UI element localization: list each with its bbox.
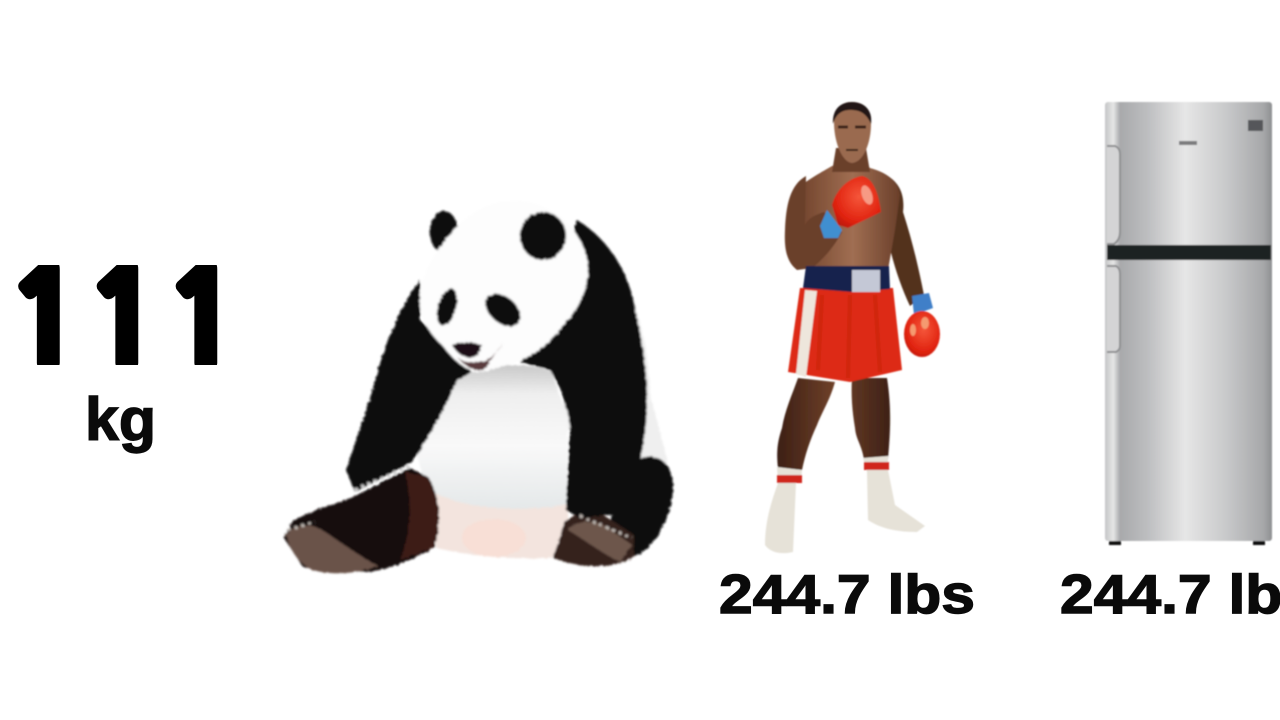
panda right foot bbox=[553, 514, 634, 566]
boxer right arm bbox=[880, 172, 924, 306]
illustration: boxer bbox=[765, 102, 940, 553]
boxer blue wrist wrap bbox=[820, 210, 842, 238]
boxer right boot bbox=[863, 456, 925, 532]
shorts stripe bbox=[796, 290, 817, 377]
panda belly bbox=[417, 365, 568, 512]
panda nose and mouth bbox=[452, 342, 482, 358]
fridge divider band bbox=[1107, 245, 1271, 260]
fridge top handle bbox=[1107, 146, 1120, 244]
panda eye right bbox=[479, 287, 527, 333]
illustration: panda bbox=[284, 201, 673, 573]
panda ear right bbox=[520, 212, 566, 260]
number 111: 111 bbox=[6, 256, 242, 384]
boxer neck and head bbox=[832, 102, 871, 172]
illustration: refrigerator bbox=[1105, 102, 1272, 545]
boxer left arm bbox=[785, 176, 842, 270]
boxer belt bbox=[803, 266, 890, 292]
boxer legs bbox=[777, 378, 890, 470]
panda tail bbox=[462, 519, 526, 557]
headline value: 111 kg bbox=[18, 265, 218, 454]
panda left arm bbox=[346, 280, 472, 492]
panda near leg bbox=[284, 468, 439, 572]
boxer hanging glove bbox=[904, 311, 940, 357]
boxer red glove bbox=[832, 176, 881, 228]
fridge feet bbox=[1109, 538, 1265, 545]
boxer weight label: 244.7 lbs bbox=[719, 563, 975, 625]
boxer left sock band bbox=[777, 475, 802, 483]
fridge body bbox=[1105, 102, 1272, 541]
fridge logo bbox=[1179, 141, 1197, 145]
belt label bbox=[852, 270, 880, 292]
panda eye left bbox=[433, 286, 461, 328]
boxer torso bbox=[795, 162, 900, 270]
boxer shorts bbox=[788, 288, 902, 382]
boxer right wrist wrap bbox=[912, 293, 933, 315]
panda ear left bbox=[430, 211, 458, 253]
panda left foot bbox=[286, 525, 378, 573]
panda far leg bbox=[600, 457, 673, 556]
boxer left boot bbox=[765, 467, 802, 553]
panda head bbox=[420, 201, 588, 372]
panda back bbox=[560, 240, 668, 500]
panda lower belly bbox=[430, 490, 570, 559]
unit kg: kg bbox=[85, 386, 156, 453]
boxer right sock band bbox=[864, 462, 889, 470]
panda right arm and shoulder bbox=[520, 220, 647, 518]
panda paw claws bbox=[355, 466, 410, 490]
fridge display bbox=[1248, 120, 1263, 131]
fridge bottom handle bbox=[1107, 266, 1120, 352]
